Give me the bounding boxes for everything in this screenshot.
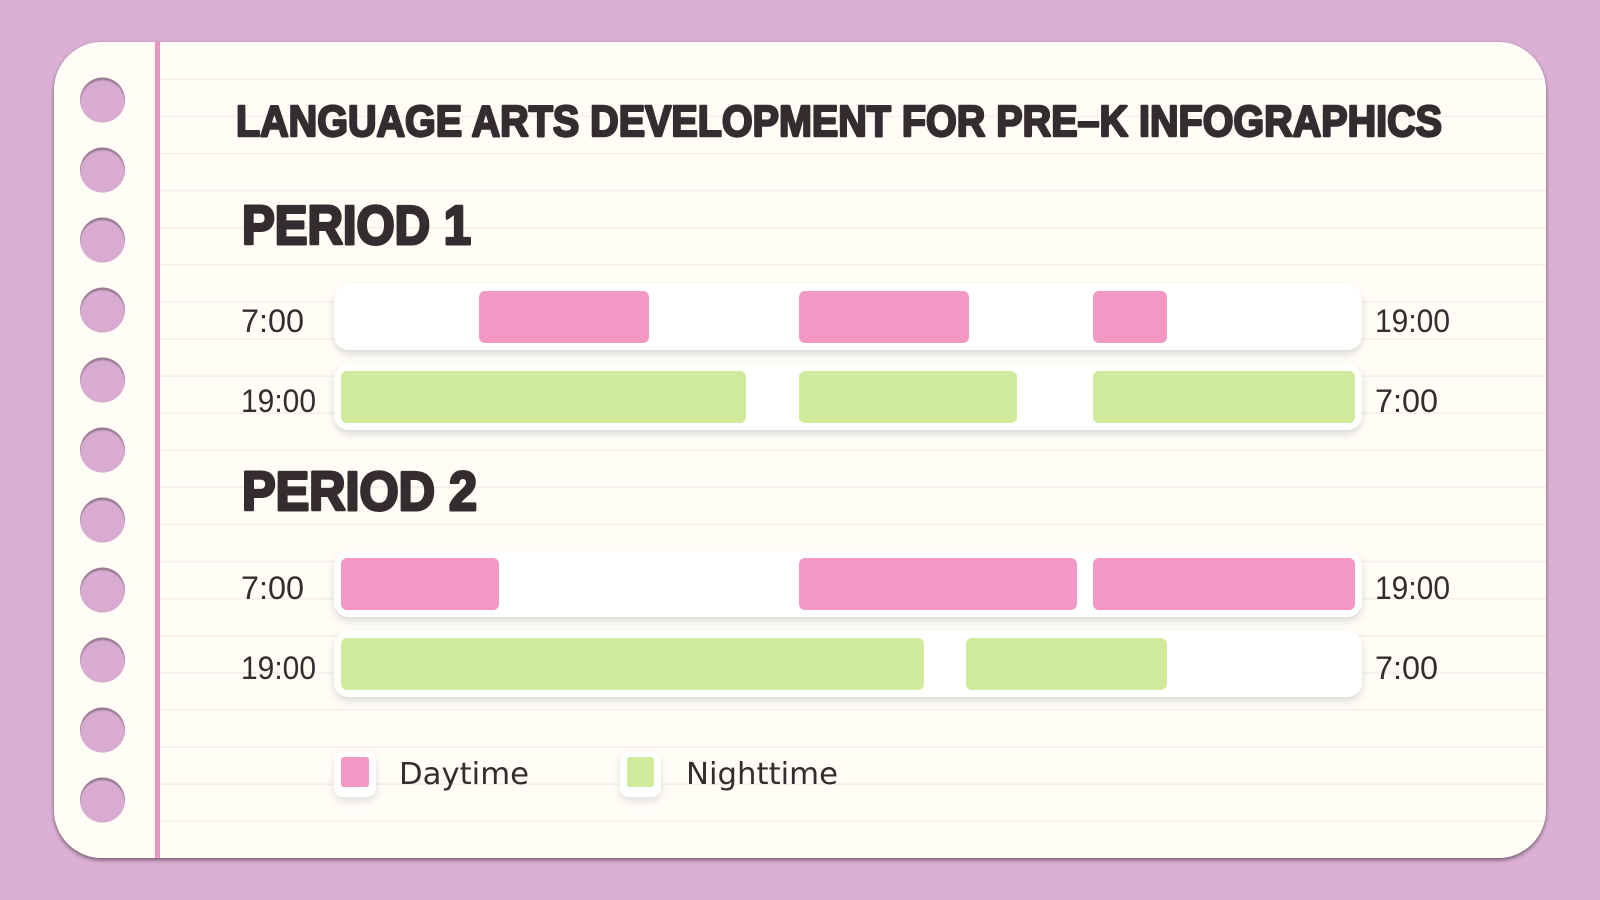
label: start 19:00: 19:00 — [241, 383, 316, 419]
track — [334, 364, 1362, 430]
label: end 7:00: 7:00 — [1375, 383, 1438, 419]
track — [334, 551, 1362, 617]
track — [334, 284, 1362, 350]
daytime block 1 — [479, 291, 649, 343]
nighttime block 3 — [1093, 371, 1355, 423]
period 1 nighttime row — [241, 364, 1438, 430]
nighttime block 1 — [341, 638, 924, 690]
label: start 7:00: 7:00 — [241, 570, 304, 606]
heading: period 1: PERIOD 1 — [242, 194, 471, 256]
period 1 daytime row — [241, 284, 1450, 350]
binder holes — [80, 78, 125, 825]
daytime block 2 — [799, 558, 1077, 610]
legend — [334, 752, 838, 797]
period 2 nighttime row — [241, 631, 1438, 697]
daytime block 2 — [799, 291, 969, 343]
label: end 19:00: 19:00 — [1375, 570, 1450, 606]
daytime block 3 — [1093, 558, 1355, 610]
legend: nighttime — [620, 752, 838, 797]
legend: daytime: Daytime — [399, 757, 529, 792]
legend: daytime — [334, 752, 529, 797]
nighttime block 1 — [341, 371, 746, 423]
legend: nighttime: Nighttime — [686, 757, 838, 792]
title: LANGUAGE ARTS DEVELOPMENT FOR PRE–K INFOGRAPHICS — [236, 97, 1442, 146]
nighttime block 2 — [966, 638, 1167, 690]
pink margin line — [155, 42, 160, 858]
label: end 19:00: 19:00 — [1375, 303, 1450, 339]
track — [334, 631, 1362, 697]
label: start 7:00: 7:00 — [241, 303, 304, 339]
period 2 daytime row — [241, 551, 1450, 617]
daytime block 1 — [341, 558, 499, 610]
label: end 7:00: 7:00 — [1375, 650, 1438, 686]
label: start 19:00: 19:00 — [241, 650, 316, 686]
nighttime block 2 — [799, 371, 1017, 423]
daytime block 3 — [1093, 291, 1167, 343]
heading: period 2: PERIOD 2 — [242, 460, 477, 522]
